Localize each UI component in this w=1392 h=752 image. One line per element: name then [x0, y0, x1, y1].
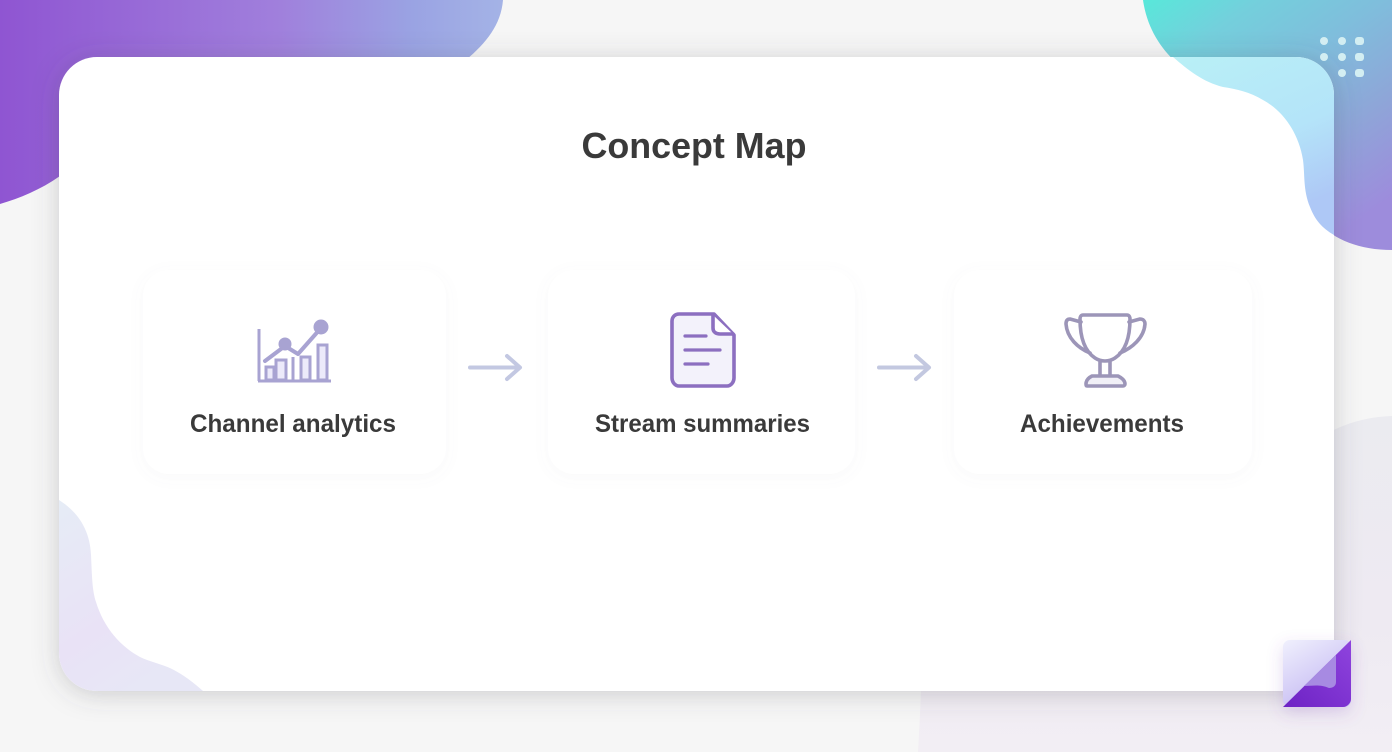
icon: trophy [1066, 315, 1145, 386]
card corner: top right tint [1173, 57, 1334, 235]
panel: main card [59, 57, 1334, 691]
label: Stream summaries [595, 410, 810, 438]
card corner: bottom left tint [59, 500, 203, 691]
panel: achievements [954, 270, 1252, 474]
panel: stream summaries [548, 270, 855, 474]
label: Achievements [1020, 410, 1184, 438]
arrow: summaries to achievements [879, 356, 929, 379]
icon: dot grid [1320, 37, 1364, 77]
title: Concept Map [582, 125, 806, 166]
icon: document [672, 314, 734, 386]
blob: top left purple [0, 0, 503, 204]
icon: folded corner tile [1283, 640, 1351, 707]
icon: bar chart with trend line [258, 320, 331, 381]
background shape: bottom right [918, 416, 1392, 752]
arrow: analytics to summaries [470, 356, 520, 379]
label: Channel analytics [190, 410, 396, 438]
blob: top right teal [1143, 0, 1392, 250]
panel: channel analytics [143, 270, 446, 474]
